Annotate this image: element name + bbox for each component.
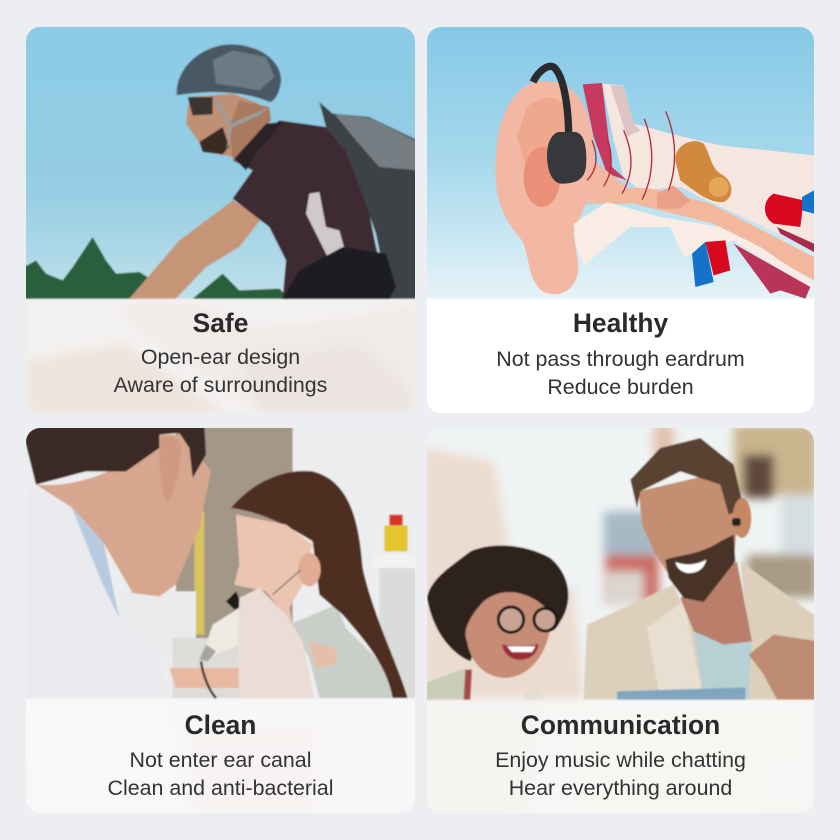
background sky bbox=[427, 27, 814, 299]
panel: communication bbox=[427, 428, 814, 813]
text: healthy description: Not pass through eardrum bbox=[496, 347, 745, 371]
text: communication description: Enjoy music while chatting bbox=[495, 748, 746, 772]
text: clean description bbox=[108, 748, 333, 800]
panel: healthy bbox=[427, 27, 814, 413]
text: healthy description bbox=[496, 347, 745, 399]
photo: cyclist bbox=[23, 24, 419, 299]
heading: clean: Clean bbox=[185, 710, 256, 740]
text: communication description bbox=[495, 748, 746, 800]
photo: people faded lower band bbox=[427, 705, 814, 813]
text: clean description: Clean and anti-bacterial bbox=[108, 776, 333, 800]
text: clean description: Not enter ear canal bbox=[130, 748, 311, 772]
text: healthy description: Reduce burden bbox=[547, 375, 694, 399]
photo: cyclist faded lower band bbox=[26, 304, 415, 413]
photo: doctor and girl bbox=[23, 425, 419, 699]
heading: safe: Safe bbox=[193, 308, 248, 338]
photo: doctor faded lower band bbox=[26, 705, 319, 813]
text: safe description: Aware of surroundings bbox=[114, 373, 327, 397]
heading: communication: Communication bbox=[521, 710, 720, 740]
panel: safe bbox=[26, 27, 415, 413]
text: communication description: Hear everything around bbox=[509, 776, 732, 800]
text: safe description: Open-ear design bbox=[141, 345, 300, 369]
text: safe description bbox=[114, 345, 327, 397]
heading: healthy: Healthy bbox=[573, 308, 668, 338]
panel: clean bbox=[26, 428, 415, 813]
photo: two people laughing bbox=[424, 425, 819, 700]
illustration: ear anatomy bbox=[495, 66, 814, 299]
